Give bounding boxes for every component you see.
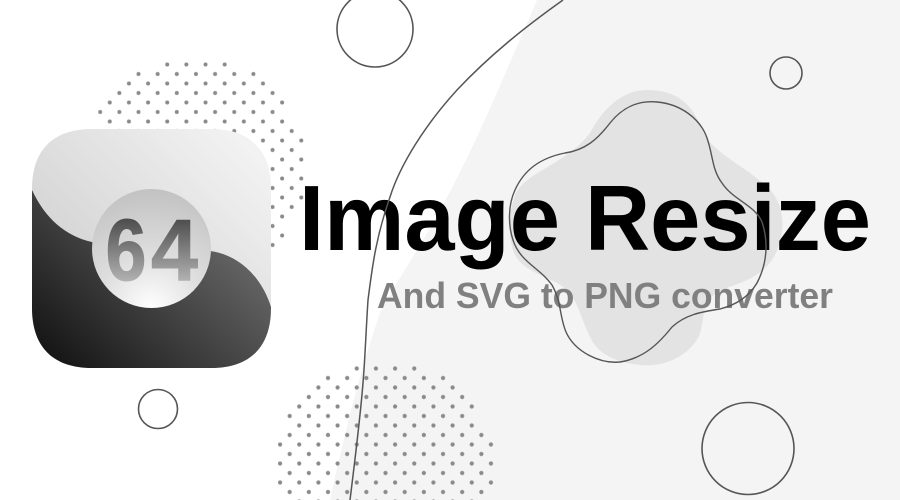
digit 4: 4 [151,202,198,299]
icon: number 64 [106,202,198,299]
circle: top right [770,57,802,89]
icon: 64 app icon [32,129,271,368]
circle: top centre [337,0,413,67]
dot pattern: lower [275,363,495,500]
dot pattern: upper [94,60,305,250]
icon: dark lower area [32,190,271,368]
icon: light upper area [32,129,271,368]
circle: below icon [138,390,178,428]
curve line [350,0,563,500]
blob outline [509,102,766,362]
title: Image Resize [299,166,871,270]
circle: bottom right [702,402,794,494]
blob: filled grey shape [510,90,782,365]
background panel: light grey sweep [330,0,900,500]
digit 6: 6 [106,202,146,299]
subtitle: And SVG to PNG converter [377,275,833,316]
icon: central ball [92,189,211,308]
